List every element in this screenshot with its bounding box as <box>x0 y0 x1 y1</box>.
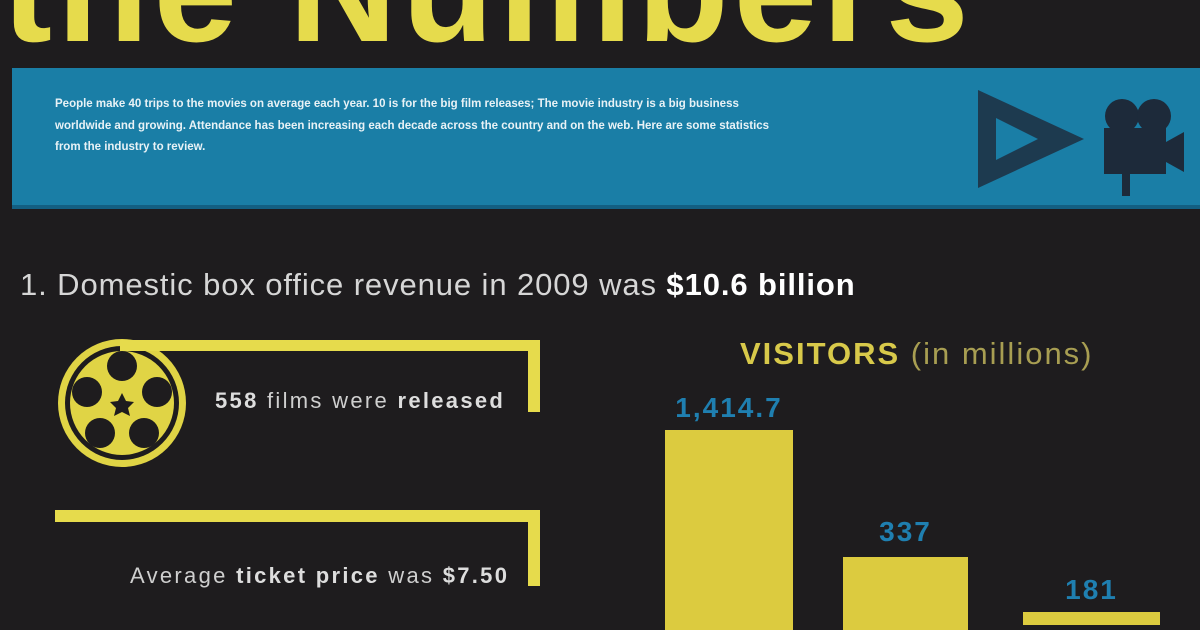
bar 2 <box>843 557 968 630</box>
bar chart: visitors <box>665 392 1160 630</box>
text: films released: 558 films were released <box>215 388 505 413</box>
icon: play triangle and camera <box>978 90 1184 196</box>
text: ticket price: Average ticket price was $7.50 <box>130 563 509 588</box>
bar 3 <box>1023 612 1160 625</box>
bar 3 label: 181 <box>1065 574 1118 605</box>
bar 1 <box>665 430 793 630</box>
bracket: ticket price <box>55 510 540 586</box>
chart heading: visitors: VISITORS (in millions) <box>740 336 1094 371</box>
intro text: People make 40 trips to the movies on average each year. 10 is for the big film releases; The movie industry is a big business worldwide and growing. Attendance has been increasing each decade across the country and on the web. Here are some statistics from the industry to review. <box>55 98 769 153</box>
icon: film reel <box>58 339 186 467</box>
heading: box office revenue: 1. Domestic box office revenue in 2009 was $10.6 billion <box>20 267 856 302</box>
bar 1 label: 1,414.7 <box>675 392 783 423</box>
panel: intro banner <box>12 68 1200 209</box>
bar 2 label: 337 <box>879 516 932 547</box>
bracket: films released <box>120 340 540 412</box>
